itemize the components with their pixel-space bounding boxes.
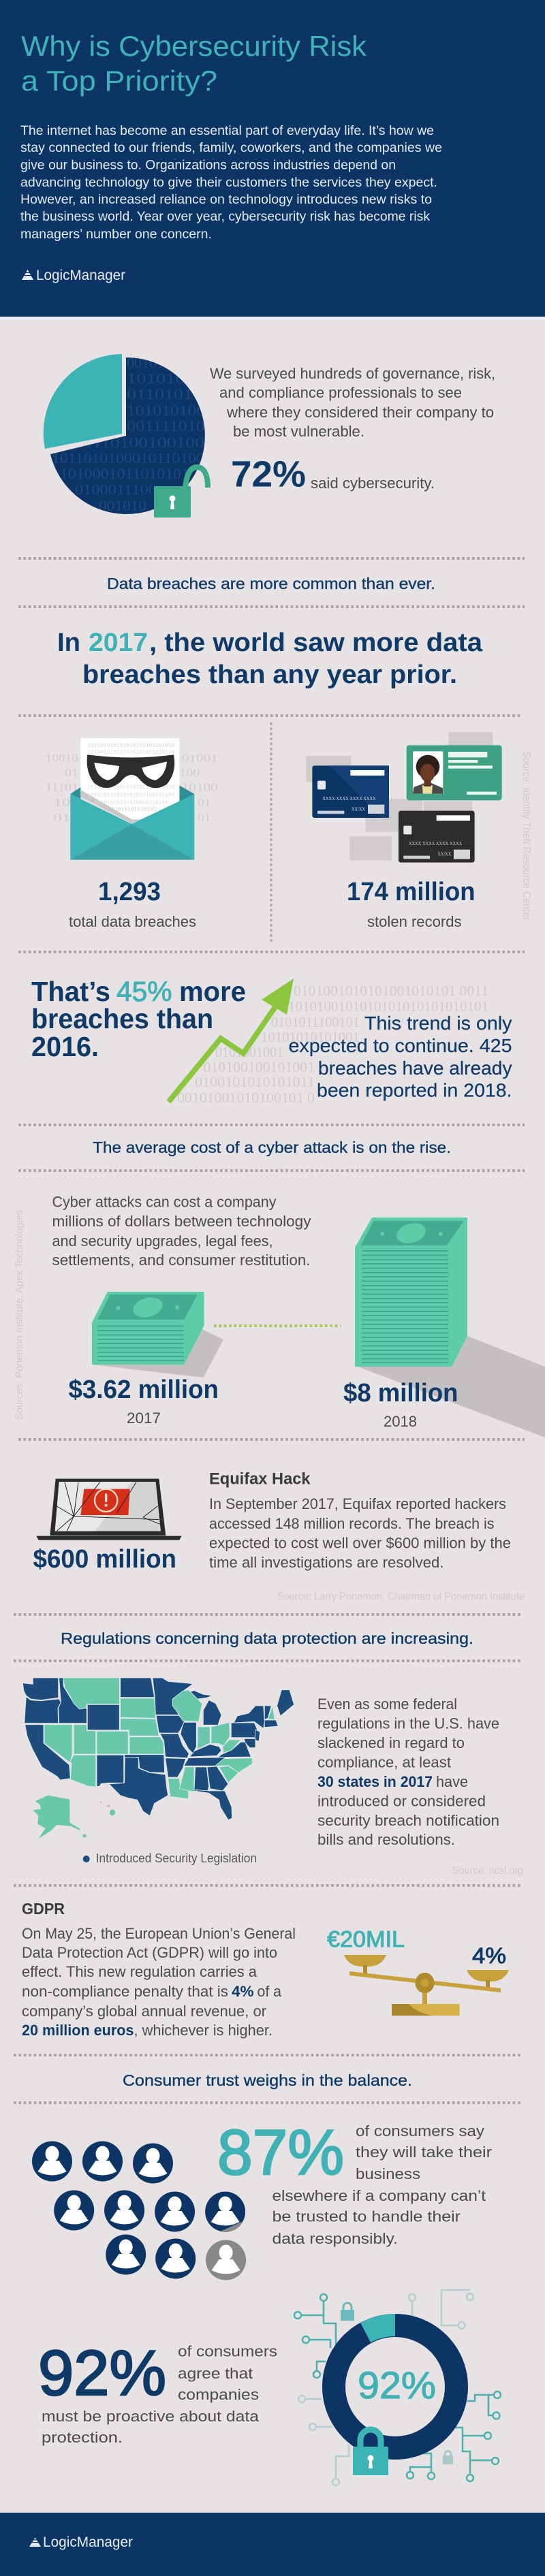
icon: envelope with mask: 101001010111010101001010110 xyxy=(87,750,175,756)
survey text xyxy=(210,365,495,440)
binary background xyxy=(177,983,488,1106)
icon: ID and credit cards xyxy=(306,732,502,863)
icon: small padlocks xyxy=(341,2303,453,2464)
stat: $3.62 million: $3.62 million xyxy=(68,1376,219,1404)
cost text: settlements, and consumer restitution. xyxy=(52,1252,311,1269)
subheading: Equifax Hack: Equifax Hack xyxy=(209,1469,311,1489)
panel: 45% more xyxy=(31,976,512,1106)
icon: ID and credit cards: XX/XX xyxy=(437,851,452,857)
icon: envelope with mask: 01 xyxy=(53,811,70,824)
GDPR text xyxy=(22,1925,296,2039)
intro text: stay connected to our friends, family, coworkers, and the companies we xyxy=(20,140,442,155)
regulations text: regulations in the U.S. have xyxy=(317,1715,499,1732)
GDPR text: Data Protection Act (GDPR) will go into xyxy=(22,1944,277,1961)
icon: envelope with mask: 01 xyxy=(198,811,211,824)
panel: consumer trust 92% xyxy=(38,2290,501,2485)
chart: 92% donut: 92% xyxy=(358,2364,436,2406)
panel: GDPR xyxy=(22,1900,509,2039)
binary background: 00101001010100101 0 xyxy=(177,1090,315,1106)
subheading: GDPR: GDPR xyxy=(22,1900,65,1918)
proactive text: agree that xyxy=(178,2365,253,2382)
stat: 92%: 92% xyxy=(38,2337,166,2408)
pie chart: 01101011 xyxy=(127,385,202,402)
stat: 174 million: 174 million xyxy=(347,878,476,906)
trend text: breaches have already xyxy=(318,1058,512,1079)
headline: 45% xyxy=(31,976,246,1062)
icon: envelope with mask: 01101010101010010110101 xyxy=(94,801,168,806)
binary background: 1010100101010101010101010101 xyxy=(288,998,488,1015)
icon: envelope with mask: 10 xyxy=(53,796,70,809)
headline: 2017: 2017 xyxy=(89,629,148,657)
cost text: and security upgrades, legal fees, xyxy=(52,1233,272,1250)
stat: 1,293: 1,293 xyxy=(98,878,161,906)
regulations text: Even as some federal xyxy=(317,1696,457,1713)
proactive text xyxy=(42,2342,277,2446)
icon: money stack 2017 xyxy=(92,1292,223,1378)
icon: ID and credit cards: XXXX XXXX XXXX XXXX xyxy=(409,840,463,846)
GDPR text: of a xyxy=(258,1983,281,2000)
stat: $8 million: $8 million xyxy=(343,1379,458,1408)
GDPR text: company’s global annual revenue, or xyxy=(22,2003,266,2020)
icon: envelope with mask: 01 xyxy=(65,766,78,779)
headline: 45%: breaches than xyxy=(31,1003,213,1034)
headline: 2017: In xyxy=(57,629,80,657)
proactive text: of consumers xyxy=(178,2342,277,2360)
trend text: expected to continue. 425 xyxy=(289,1035,512,1056)
binary background: 0100101010101011 xyxy=(195,1074,315,1090)
proactive text: companies xyxy=(178,2386,259,2403)
survey text: be most vulnerable. xyxy=(233,423,364,440)
headline: 45%: 2016. xyxy=(31,1031,99,1062)
survey text: and compliance professionals to see xyxy=(219,384,462,401)
icon: envelope with mask: 11101 xyxy=(46,781,78,794)
logo: LogicManager: LogicManager xyxy=(36,268,125,283)
label: 4%: 4% xyxy=(472,1943,506,1968)
consumer text: data responsibly. xyxy=(272,2230,398,2247)
panel: Equifax hack xyxy=(33,1469,525,1603)
GDPR text: On May 25, the European Union’s General xyxy=(22,1925,296,1942)
intro text: the business world. Year over year, cybersecurity risk has become risk xyxy=(20,209,430,224)
arrow: rising trend xyxy=(169,979,294,1102)
icon: envelope with mask: 100 xyxy=(179,766,200,779)
map: United States xyxy=(22,1678,294,1839)
heading: average cost: The average cost of a cyber attack is on the rise. xyxy=(93,1139,451,1156)
stat: 72% xyxy=(231,454,435,494)
Equifax text xyxy=(209,1495,511,1571)
binary background: 0101011100101 xyxy=(271,1014,360,1030)
Equifax text: accessed 148 million records. The breach is xyxy=(209,1515,495,1532)
heading: consumer trust: Consumer trust weighs in the balance. xyxy=(123,2071,412,2089)
proactive text: protection. xyxy=(42,2429,123,2446)
consumer text: elsewhere if a company can’t xyxy=(272,2187,486,2204)
intro text: However, an increased reliance on technology introduces new risks to xyxy=(20,192,432,207)
panel: regulations xyxy=(22,1678,523,1877)
binary background: 0101001010101001010101 0011 xyxy=(294,983,488,999)
title: a Top Priority? xyxy=(21,65,217,97)
icon: envelope with mask xyxy=(46,738,218,860)
icon: envelope with mask: 10010 xyxy=(46,751,78,764)
icon: ID and credit cards: XX/XX xyxy=(352,806,366,812)
icon: balance scale xyxy=(344,1955,509,2016)
icon: envelope with mask: 101010101001010101010101010 xyxy=(87,784,175,790)
pie chart: 001010 xyxy=(99,497,146,514)
survey text: We surveyed hundreds of governance, risk, xyxy=(210,365,495,382)
pie chart: 101010100 xyxy=(127,402,205,419)
panel: cost of cyber attacks xyxy=(14,1194,545,1437)
consumer text: business xyxy=(356,2165,420,2182)
GDPR text: non-compliance penalty that is xyxy=(22,1983,228,2000)
stat: 87%: 87% xyxy=(217,2116,344,2188)
consumer text xyxy=(272,2122,493,2247)
source note: Source: ncsl.org xyxy=(452,1865,523,1877)
icon: money stack 2018 xyxy=(355,1218,545,1437)
panel: total breaches xyxy=(46,738,218,930)
source note: Source: Larry Ponemon, Chairman of Ponemon Institute xyxy=(277,1591,525,1603)
headline: 45%: That’s xyxy=(31,976,110,1007)
icon: envelope with mask: 110101010101010101101101010 xyxy=(87,744,175,749)
title: Why is Cybersecurity Risk xyxy=(21,30,367,62)
regulations text: introduced or considered xyxy=(317,1792,486,1810)
icon: envelope with mask: 101010101010101010100101101 xyxy=(87,793,175,798)
connector: dotted line xyxy=(214,1324,341,1327)
panel: consumer trust 87% xyxy=(32,2116,493,2280)
intro text xyxy=(20,123,442,242)
source note: Source: Identity Theft Resource Center xyxy=(520,751,532,921)
chart: 92% donut xyxy=(334,2314,456,2448)
pie chart: 001111010 xyxy=(127,417,205,434)
GDPR text: 4% xyxy=(232,1983,253,2000)
intro text: give our business to. Organizations across industries depend on xyxy=(20,158,396,173)
headline: 2017: breaches than any year prior. xyxy=(82,661,457,689)
label: total data breaches: total data breaches xyxy=(69,913,196,930)
consumer text: they will take their xyxy=(356,2144,493,2161)
heading: data breaches: Data breaches are more common than ever. xyxy=(107,575,435,592)
panel: survey xyxy=(44,354,495,518)
pie chart: 0100011100 xyxy=(75,481,157,498)
legend: Introduced Security Legislation xyxy=(96,1851,257,1865)
label: 2018: 2018 xyxy=(384,1413,417,1430)
regulations text: compliance, at least xyxy=(317,1754,452,1770)
icon: envelope with mask: 01 xyxy=(198,796,211,809)
label: €20MIL: €20MIL xyxy=(327,1926,405,1952)
trend text: been reported in 2018. xyxy=(317,1080,512,1100)
headline: 2017: , the world saw more data xyxy=(149,629,483,657)
logo: LogicManager: LogicManager xyxy=(43,2534,133,2550)
intro text: managers’ number one concern. xyxy=(20,227,212,242)
icon: open padlock xyxy=(154,467,208,518)
pie chart: 1010001011010101 xyxy=(60,465,189,482)
regulations text: slackened in regard to xyxy=(317,1734,465,1751)
heading: regulations: Regulations concerning data protection are increasing. xyxy=(61,1629,473,1647)
Equifax text: time all investigations are resolved. xyxy=(209,1554,444,1571)
icon: circuit lines xyxy=(294,2290,501,2485)
survey text: where they considered their company to xyxy=(226,404,494,421)
stat: 72%: said cybersecurity. xyxy=(311,475,435,492)
panel: stolen records xyxy=(306,732,532,930)
headline: 45%: more xyxy=(179,976,246,1007)
headline: 45%: 45% xyxy=(116,976,172,1007)
cost text: millions of dollars between technology xyxy=(52,1213,311,1230)
label: stolen records: stolen records xyxy=(367,913,462,930)
intro text: advancing technology to give their customers the services they expect. xyxy=(20,175,437,190)
trend text: This trend is only xyxy=(364,1013,512,1034)
binary background: 10101010101001 xyxy=(261,1029,360,1045)
proactive text: must be proactive about data xyxy=(42,2408,260,2425)
regulations text: security breach notification xyxy=(317,1812,499,1829)
pie chart xyxy=(44,354,205,514)
consumer text: be trusted to handle their xyxy=(272,2208,461,2225)
trend text xyxy=(289,1013,512,1100)
cost text xyxy=(52,1194,311,1269)
GDPR text: effect. This new regulation carries a xyxy=(22,1963,257,1980)
GDPR text: 20 million euros xyxy=(22,2022,134,2039)
stat: $600 million: $600 million xyxy=(33,1545,176,1574)
icon: padlock xyxy=(353,2430,388,2475)
panel: header xyxy=(0,0,545,320)
Equifax text: expected to cost well over $600 million by the xyxy=(209,1535,511,1552)
title xyxy=(21,30,367,97)
regulations text xyxy=(317,1696,499,1848)
consumer text: of consumers say xyxy=(356,2122,485,2140)
icon: envelope with mask: 01001 xyxy=(182,751,218,764)
intro text: The internet has become an essential part of everyday life. It’s how we xyxy=(20,123,434,138)
cost text: Cyber attacks can cost a company xyxy=(52,1194,277,1211)
regulations text: 30 states in 2017 xyxy=(317,1773,433,1790)
binary background: 0101001001 xyxy=(215,1044,283,1060)
pie chart: 1010101 xyxy=(127,370,195,387)
icon: envelope with mask: 101010101010101 xyxy=(108,808,157,813)
regulations text: have xyxy=(436,1773,468,1790)
pie chart: 00101 xyxy=(127,354,164,371)
Equifax text: In September 2017, Equifax reported hackers xyxy=(209,1495,506,1512)
binary background: 010100100101001 xyxy=(203,1059,315,1075)
headline: 2017 xyxy=(57,629,483,689)
icon: cracked laptop xyxy=(36,1479,182,1540)
chart: people icons xyxy=(32,2141,246,2280)
source note: Sources: Ponemon Institute, Apex Technologies xyxy=(14,1210,25,1420)
pie chart: 1011010100010110100 xyxy=(52,449,204,466)
GDPR text: , whichever is higher. xyxy=(134,2022,272,2039)
panel: footer xyxy=(0,2513,545,2576)
stat: 72%: 72% xyxy=(231,454,306,494)
icon: envelope with mask: 10100 xyxy=(182,781,218,794)
regulations text: bills and resolutions. xyxy=(317,1831,455,1848)
icon: ID and credit cards: XXXX XXXX XXXX XXXX xyxy=(322,795,376,801)
label: 2017: 2017 xyxy=(127,1410,161,1427)
pie chart: 0000110100100100 xyxy=(54,434,204,451)
